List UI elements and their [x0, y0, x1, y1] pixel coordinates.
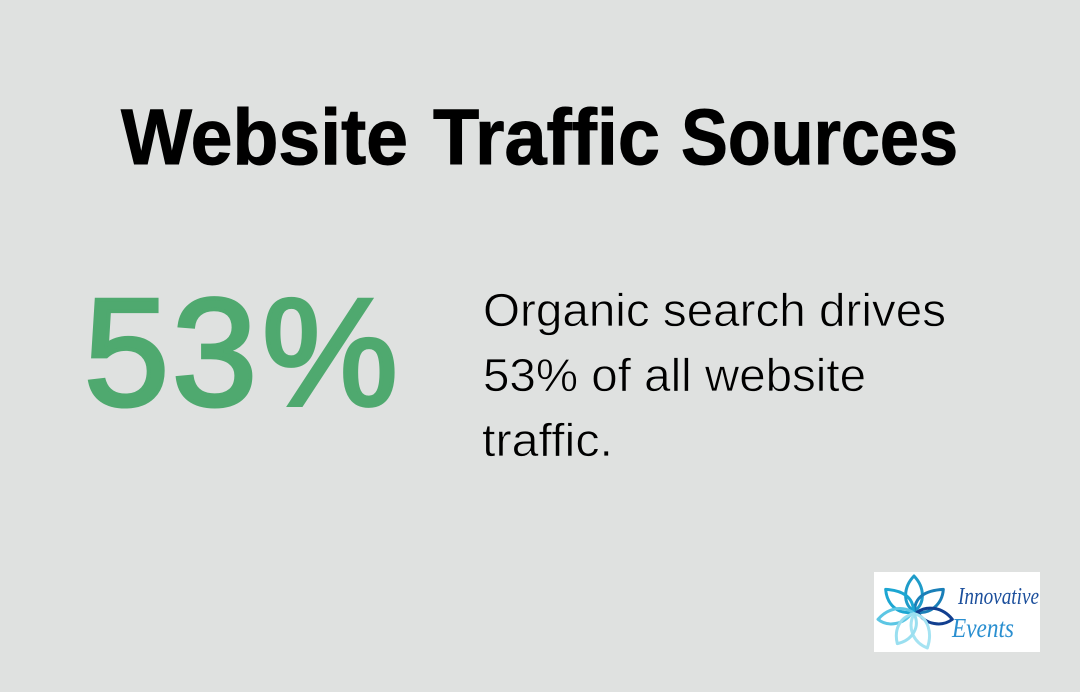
logo: Innovative Events: [874, 572, 1040, 652]
logo wordmark: Innovative: [957, 584, 1039, 610]
description text: 53% of all website: [483, 349, 866, 401]
description text: traffic.: [482, 414, 613, 466]
title: Website: [121, 92, 408, 181]
icon: lotus flower: [878, 576, 952, 648]
title: Traffic: [433, 92, 660, 181]
title: [121, 92, 958, 181]
logo: Innovative Events: Events: [951, 613, 1014, 643]
title: Sources: [681, 92, 958, 181]
description text: Organic search drives: [483, 284, 946, 336]
description text: [482, 284, 946, 466]
big statistic: 53%: 53%: [84, 267, 398, 438]
